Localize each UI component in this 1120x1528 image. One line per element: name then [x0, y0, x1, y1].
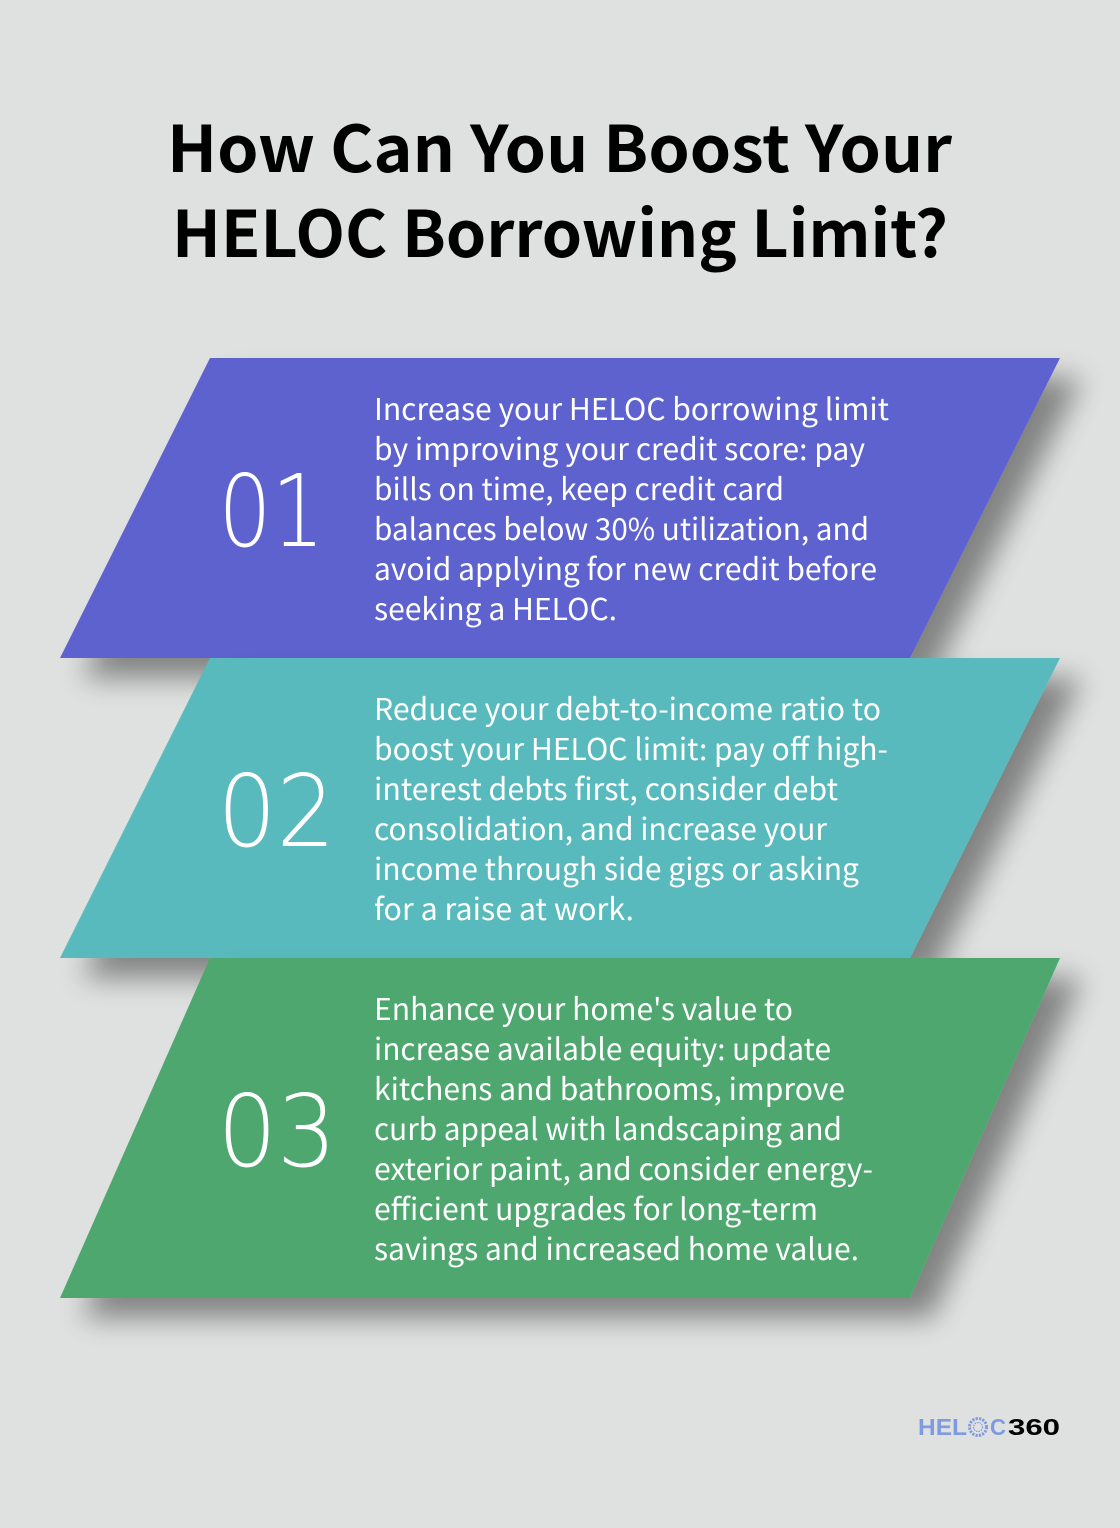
- text: step 01 body: bills on time, keep credit card: [374, 465, 784, 509]
- text: step 01 body: balances below 30% utilization, and: [374, 505, 869, 549]
- title: [167, 99, 952, 276]
- text: step 01 body: by improving your credit score: pay: [374, 425, 865, 469]
- panel shape: step 03: [60, 958, 1060, 1298]
- text: step 01 body: avoid applying for new credit before: [374, 545, 877, 589]
- text: step 03 body: [374, 985, 873, 1269]
- text: step 02 body: Reduce your debt-to-income ratio to: [374, 685, 881, 729]
- number: 03: 03: [218, 1073, 336, 1190]
- panel shape: step 01: [60, 358, 1060, 658]
- logo: HELOC360: 360: [1008, 1414, 1060, 1440]
- logo: HELOC360: HEL: [918, 1414, 967, 1440]
- text: step 01 body: [374, 385, 889, 629]
- logo: HELOC360: C: [990, 1414, 1006, 1440]
- text: step 02 body: [374, 685, 888, 929]
- text: step 02 body: income through side gigs or asking: [374, 845, 859, 889]
- panel shape: step 02: [60, 658, 1060, 958]
- text: step 02 body: boost your HELOC limit: pay off high-: [374, 725, 888, 769]
- icon: logo spiral: [970, 1418, 986, 1436]
- text: step 02 body: consolidation, and increase your: [374, 805, 827, 849]
- number: 02: 02: [218, 753, 336, 870]
- panel: step 03: [60, 958, 1060, 1298]
- text: step 03 body: savings and increased home value.: [374, 1225, 859, 1269]
- text: step 01 body: Increase your HELOC borrowing limit: [374, 385, 889, 429]
- text: step 01 body: seeking a HELOC.: [374, 585, 617, 629]
- text: step 03 body: kitchens and bathrooms, improve: [374, 1065, 845, 1109]
- text: step 03 body: Enhance your home's value to: [374, 985, 793, 1029]
- title: How Can You Boost Your: [167, 99, 952, 191]
- text: step 03 body: curb appeal with landscaping and: [374, 1105, 842, 1149]
- text: step 02 body: interest debts first, consider debt: [374, 765, 838, 809]
- title: HELOC Borrowing Limit?: [172, 184, 948, 276]
- text: step 03 body: exterior paint, and consider energy-: [374, 1145, 873, 1189]
- number: 01: 01: [218, 453, 324, 570]
- text: step 03 body: efficient upgrades for long-term: [374, 1185, 818, 1229]
- text: step 03 body: increase available equity: update: [374, 1025, 831, 1069]
- panel: step 01: [60, 358, 1060, 658]
- logo: HELOC360: [918, 1414, 1060, 1440]
- text: step 02 body: for a raise at work.: [374, 885, 634, 929]
- panel: step 02: [60, 658, 1060, 958]
